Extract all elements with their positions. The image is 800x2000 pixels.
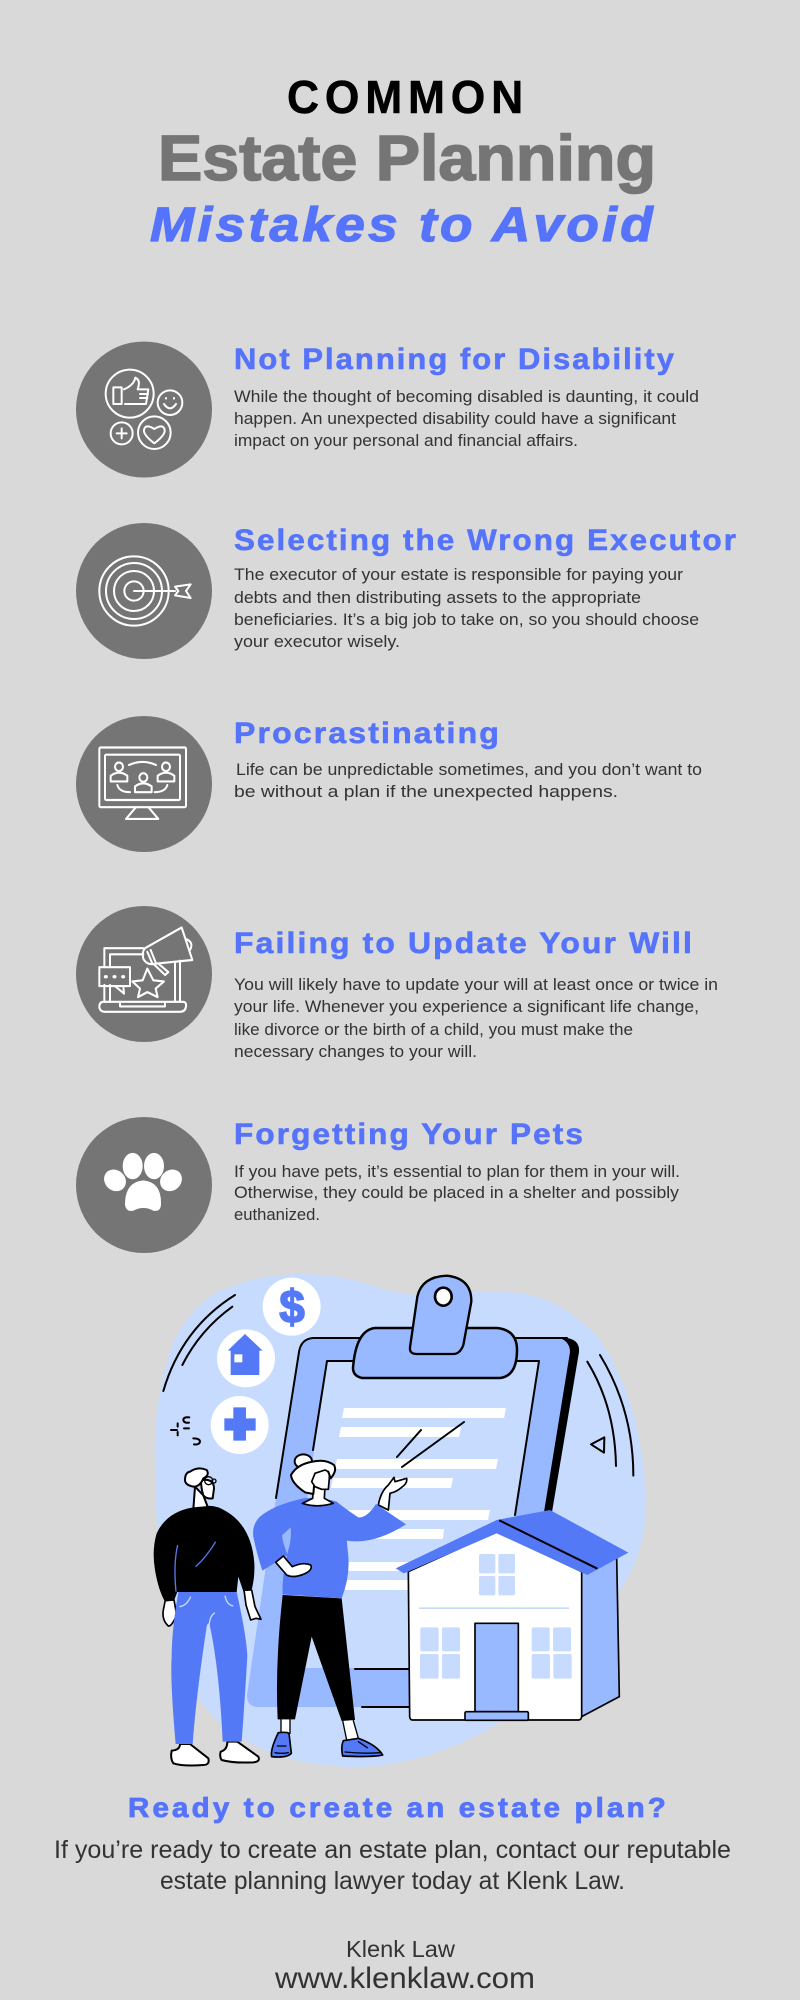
house xyxy=(396,1510,628,1720)
illustration: couple reviewing estate plan clipboard and house xyxy=(154,1274,646,1767)
panel: forgetting your pets xyxy=(76,1117,680,1253)
icon: laptop with megaphone xyxy=(76,906,212,1042)
panel: procrastinating xyxy=(76,716,702,852)
body text xyxy=(234,565,699,651)
closing text xyxy=(54,1836,731,1895)
body text: debts and then distributing assets to the appropriate xyxy=(234,588,641,607)
footer contact xyxy=(274,1936,535,1995)
icon: medical cross xyxy=(211,1396,269,1454)
icon: house xyxy=(217,1329,275,1387)
icon: paw print xyxy=(76,1117,212,1253)
closing text: estate planning lawyer today at Klenk Law. xyxy=(160,1867,625,1895)
closing heading: Ready to create an estate plan? xyxy=(128,1792,669,1823)
body text: impact on your personal and financial affairs. xyxy=(234,431,578,450)
body text xyxy=(234,387,699,450)
icon: monitor with people xyxy=(76,716,212,852)
body text: If you have pets, it’s essential to plan for them in your will. xyxy=(234,1162,680,1181)
body text: You will likely have to update your will at least once or twice in xyxy=(234,975,718,994)
background blob xyxy=(155,1274,646,1767)
panel: not planning for disability xyxy=(76,342,699,478)
icon: target and arrow xyxy=(76,523,212,659)
body text xyxy=(234,760,702,801)
heading: Not Planning for Disability xyxy=(234,343,676,376)
body text: The executor of your estate is responsible for paying your xyxy=(234,565,683,584)
panel: failing to update your will xyxy=(76,906,718,1061)
body text: Life can be unpredictable sometimes, and you don’t want to xyxy=(236,760,702,779)
title: Estate Planning xyxy=(158,122,656,194)
heading: Procrastinating xyxy=(234,717,501,750)
body text: beneficiaries. It’s a big job to take on, so you should choose xyxy=(234,610,699,629)
icon: dollar xyxy=(263,1278,321,1336)
panel: selecting the wrong executor xyxy=(76,523,738,659)
title xyxy=(150,71,656,252)
body text: Otherwise, they could be placed in a shelter and possibly xyxy=(234,1183,680,1202)
paper lines xyxy=(316,1408,506,1590)
body text xyxy=(234,1162,680,1224)
clip xyxy=(353,1328,517,1378)
body text: necessary changes to your will. xyxy=(234,1042,477,1061)
body text xyxy=(234,975,718,1061)
body text: your life. Whenever you experience a significant life change, xyxy=(234,997,699,1016)
body text: euthanized. xyxy=(234,1205,320,1224)
body text: your executor wisely. xyxy=(234,632,400,651)
motion arcs and sparkles xyxy=(163,1295,235,1444)
body text: like divorce or the birth of a child, you must make the xyxy=(234,1020,633,1039)
title: Mistakes to Avoid xyxy=(150,199,656,252)
icon: dollar: $ xyxy=(279,1281,305,1333)
finance icons xyxy=(211,1278,321,1454)
title: COMMON xyxy=(287,71,529,123)
footer contact: Klenk Law xyxy=(346,1936,455,1962)
heading: Selecting the Wrong Executor xyxy=(234,524,738,557)
heading: Forgetting Your Pets xyxy=(234,1118,585,1151)
icon: thumbs up and emoji badges xyxy=(76,342,212,478)
clipboard xyxy=(247,1276,579,1707)
person: man in black sweater xyxy=(154,1468,261,1766)
person: woman in blue sweater xyxy=(253,1454,407,1757)
body text: be without a plan if the unexpected happens. xyxy=(234,782,618,801)
closing text: If you’re ready to create an estate plan, contact our reputable xyxy=(54,1836,731,1864)
heading: Failing to Update Your Will xyxy=(234,927,694,960)
body text: While the thought of becoming disabled is daunting, it could xyxy=(234,387,699,406)
footer contact: www.klenklaw.com xyxy=(274,1962,535,1995)
body text: happen. An unexpected disability could have a significant xyxy=(234,409,676,428)
